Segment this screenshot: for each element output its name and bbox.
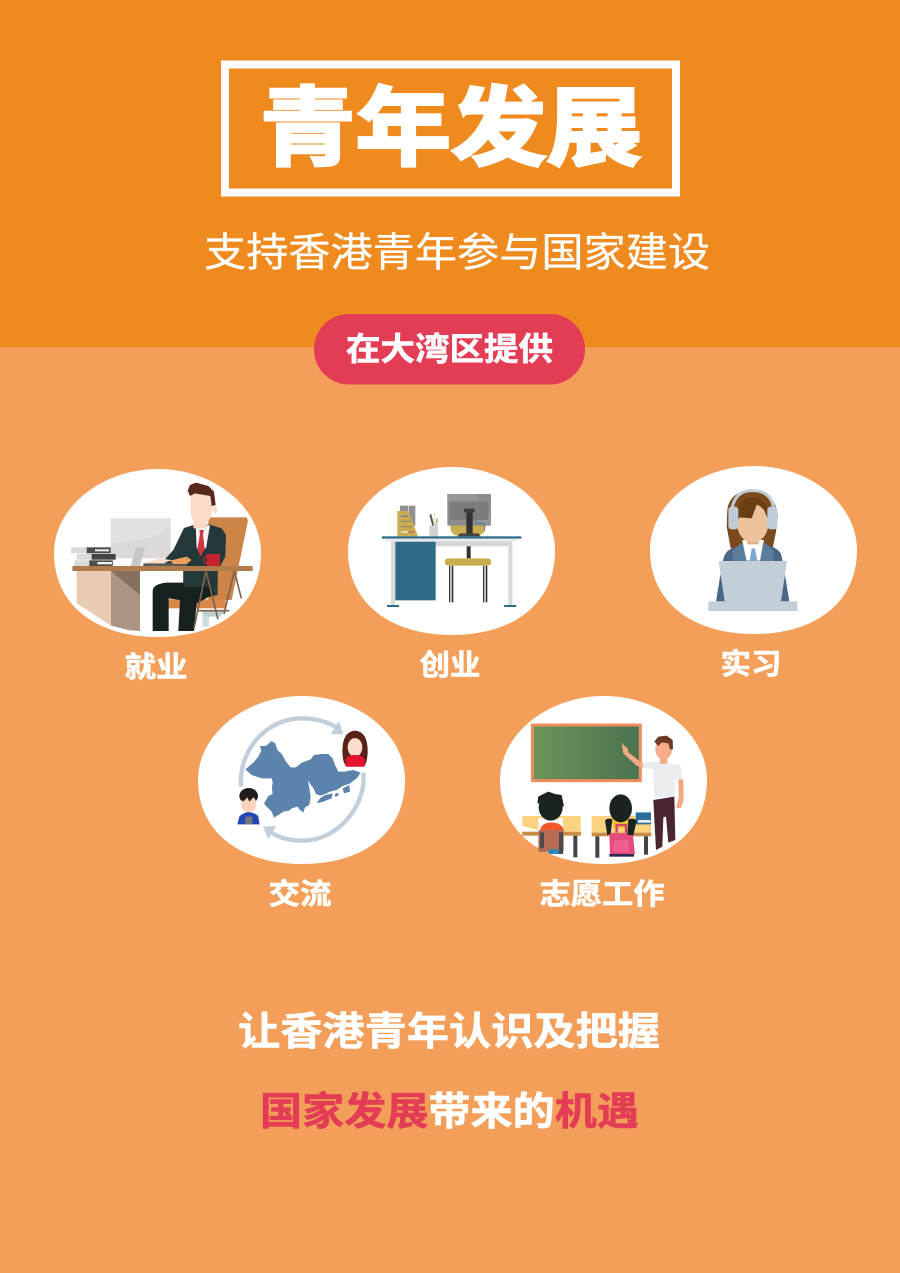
closing line one: 让香港青年认识及把握 [238,1011,660,1054]
icon: entrepreneurship [348,467,555,635]
pill badge: 在大湾区提供 [346,331,553,367]
title frame [225,64,676,192]
title: 青年发展 [260,81,642,177]
label: volunteer work: 志愿工作 [540,878,664,911]
header band [0,0,900,347]
icon: exchange [198,696,405,864]
icon: employment [54,469,261,637]
label: exchange: 交流 [268,878,332,911]
label: internship: 实习 [720,648,782,681]
pill badge [314,314,585,384]
label: entrepreneurship: 创业 [420,649,480,682]
icon: volunteer work [500,696,707,864]
icon: internship [650,466,857,634]
label: employment: 就业 [124,651,188,684]
closing line two: 国家发展 带来的机遇 [260,1091,639,1134]
subtitle: 支持香港青年参与国家建设 [204,231,710,275]
